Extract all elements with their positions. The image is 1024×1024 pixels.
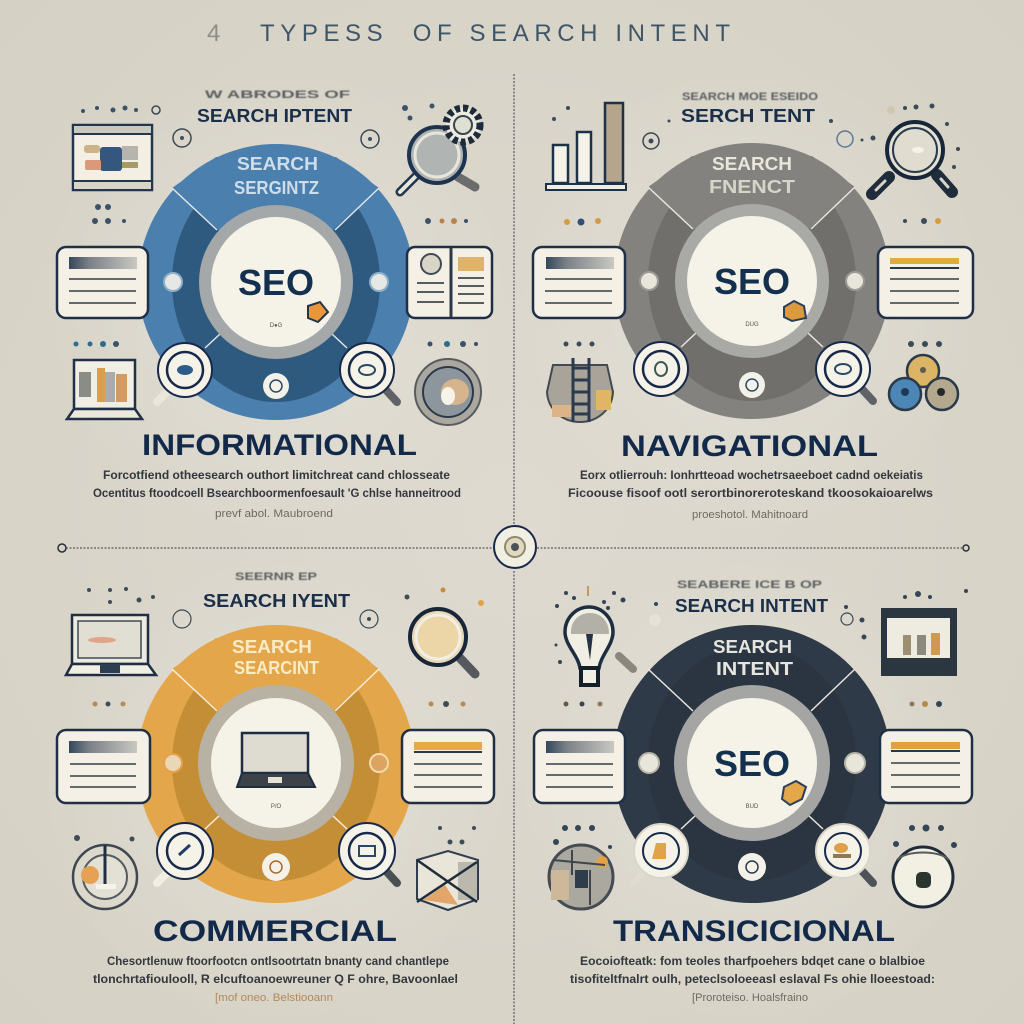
description <box>93 468 461 520</box>
heading: transactional: TRANSICICIONAL <box>613 915 895 948</box>
icon: browser window <box>73 125 152 190</box>
hub diagram: SEO <box>714 261 790 302</box>
center node <box>58 526 969 568</box>
heading: informational: INFORMATIONAL <box>142 429 417 462</box>
icon: open book card <box>407 247 492 318</box>
hub diagram: SEARCINT <box>234 658 319 678</box>
description: [Proroteiso. Hoalsfraino <box>692 992 808 1004</box>
panel heading: search intent <box>675 579 828 616</box>
hub diagram: SEO <box>238 262 314 303</box>
description: Chesortlenuw ftoorfootcn ontlsootrtatn bnanty cand chantlepe <box>107 954 449 968</box>
panel heading: search intent <box>203 571 350 611</box>
icon: text card left <box>57 730 150 803</box>
heading: commercial: COMMERCIAL <box>153 915 397 948</box>
description <box>570 954 935 1004</box>
title: TYPESS OF SEARCH INTENT <box>260 20 730 47</box>
panel heading: search intent: SEARCH IPTENT <box>197 106 352 126</box>
description: Forcotfiend otheesearch outhort limitchreat cand chlosseate <box>103 468 450 482</box>
panel heading: search intent: SERCH TENT <box>681 106 815 126</box>
icon: text card left <box>57 247 148 318</box>
icon: scattered markers <box>74 104 478 347</box>
hub diagram: D●G <box>270 323 283 329</box>
icon: clock gauge <box>73 845 137 909</box>
hub diagram: BUD <box>746 804 759 810</box>
icon: map pins <box>889 355 958 410</box>
description: proeshotol. Mahitnoard <box>692 509 808 521</box>
panel heading: search intent: SEARCH INTENT <box>675 596 828 616</box>
hub diagram: SEARCH <box>713 637 792 657</box>
hub diagram: SEARCH <box>237 154 318 174</box>
panel heading: search intent: SEARCH MOE ESEIDO <box>682 91 819 103</box>
icon: text card left <box>533 247 625 318</box>
hub diagram: SEARCH <box>712 154 792 174</box>
icon: magnifier <box>410 609 475 674</box>
panel heading: search intent <box>197 89 352 126</box>
hub diagram <box>613 625 891 903</box>
panel: transactional <box>534 579 972 1004</box>
description: Ficoouse fisoof ootl serortbinoreroteskand tkoosokaioarelws <box>568 486 933 500</box>
panel heading: search intent: SEERNR EP <box>235 571 317 583</box>
icon: magnifier <box>872 122 952 194</box>
hub diagram: INTENT <box>716 659 793 679</box>
panel heading: search intent <box>681 91 819 126</box>
description: tlonchrtafioulooll, R elcuftoanoewreuner Q F ohre, Bavoonlael <box>93 972 458 986</box>
icon: light bulb <box>565 607 633 685</box>
icon: circular chart <box>549 845 613 909</box>
hub diagram: SEO <box>714 743 790 784</box>
description <box>568 468 933 521</box>
icon: text card left <box>534 730 625 803</box>
icon: scattered markers <box>552 104 960 347</box>
hub diagram: SERGINTZ <box>234 178 319 198</box>
icon: ladder shield <box>547 358 613 422</box>
description: Eocoiofteatk: fom teoles tharfpoehers bdqet cane o blalbioe <box>580 954 925 968</box>
icon: screen with bars <box>881 608 957 676</box>
description <box>93 954 458 1004</box>
icon: text card right <box>880 730 972 803</box>
panel: navigational <box>533 91 973 521</box>
icon: coin dial <box>415 359 481 425</box>
panel heading: search intent: SEABERE ICE B OP <box>677 579 822 591</box>
hub diagram: FNENCT <box>709 177 795 197</box>
panel: commercial <box>57 571 494 1004</box>
description: Ocentitus ftoodcoell Bsearchboormenfoesault 'G chlse hanneitrood <box>93 486 461 500</box>
description: [mof oneo. Belstiooann <box>215 992 333 1004</box>
icon: bar chart <box>546 103 626 190</box>
hub diagram: P/O <box>271 804 281 810</box>
description: tisofiteltfnalrt oulh, peteclsoloeeasl eslaval Fs ohie lloeestoad: <box>570 972 935 986</box>
icon: envelope <box>417 851 478 910</box>
icon: magnifier with gear <box>400 108 480 192</box>
hub diagram: SEARCH <box>232 637 312 657</box>
description: Eorx otlierrouh: Ionhrtteoad wochetrsaeeboet cadnd oekeiatis <box>580 468 923 482</box>
icon: text card right <box>402 730 494 803</box>
icon: scattered markers <box>553 586 968 849</box>
icon: laptop with charts <box>67 360 142 419</box>
hub diagram <box>614 143 890 419</box>
icon: laptop <box>66 615 156 675</box>
panel heading: search intent: W ABRODES OF <box>205 89 350 101</box>
hub diagram <box>138 144 414 420</box>
hub diagram <box>137 625 415 903</box>
icon: round badge <box>893 847 953 907</box>
title: 4 <box>207 20 220 47</box>
icon: scattered markers <box>74 587 484 844</box>
panel heading: search intent: SEARCH IYENT <box>203 591 350 611</box>
hub diagram: DUG <box>745 322 759 328</box>
heading: navigational: NAVIGATIONAL <box>621 430 878 463</box>
icon: text card right <box>878 247 973 318</box>
panel: informational <box>57 89 492 520</box>
description: prevf abol. Maubroend <box>215 508 333 520</box>
